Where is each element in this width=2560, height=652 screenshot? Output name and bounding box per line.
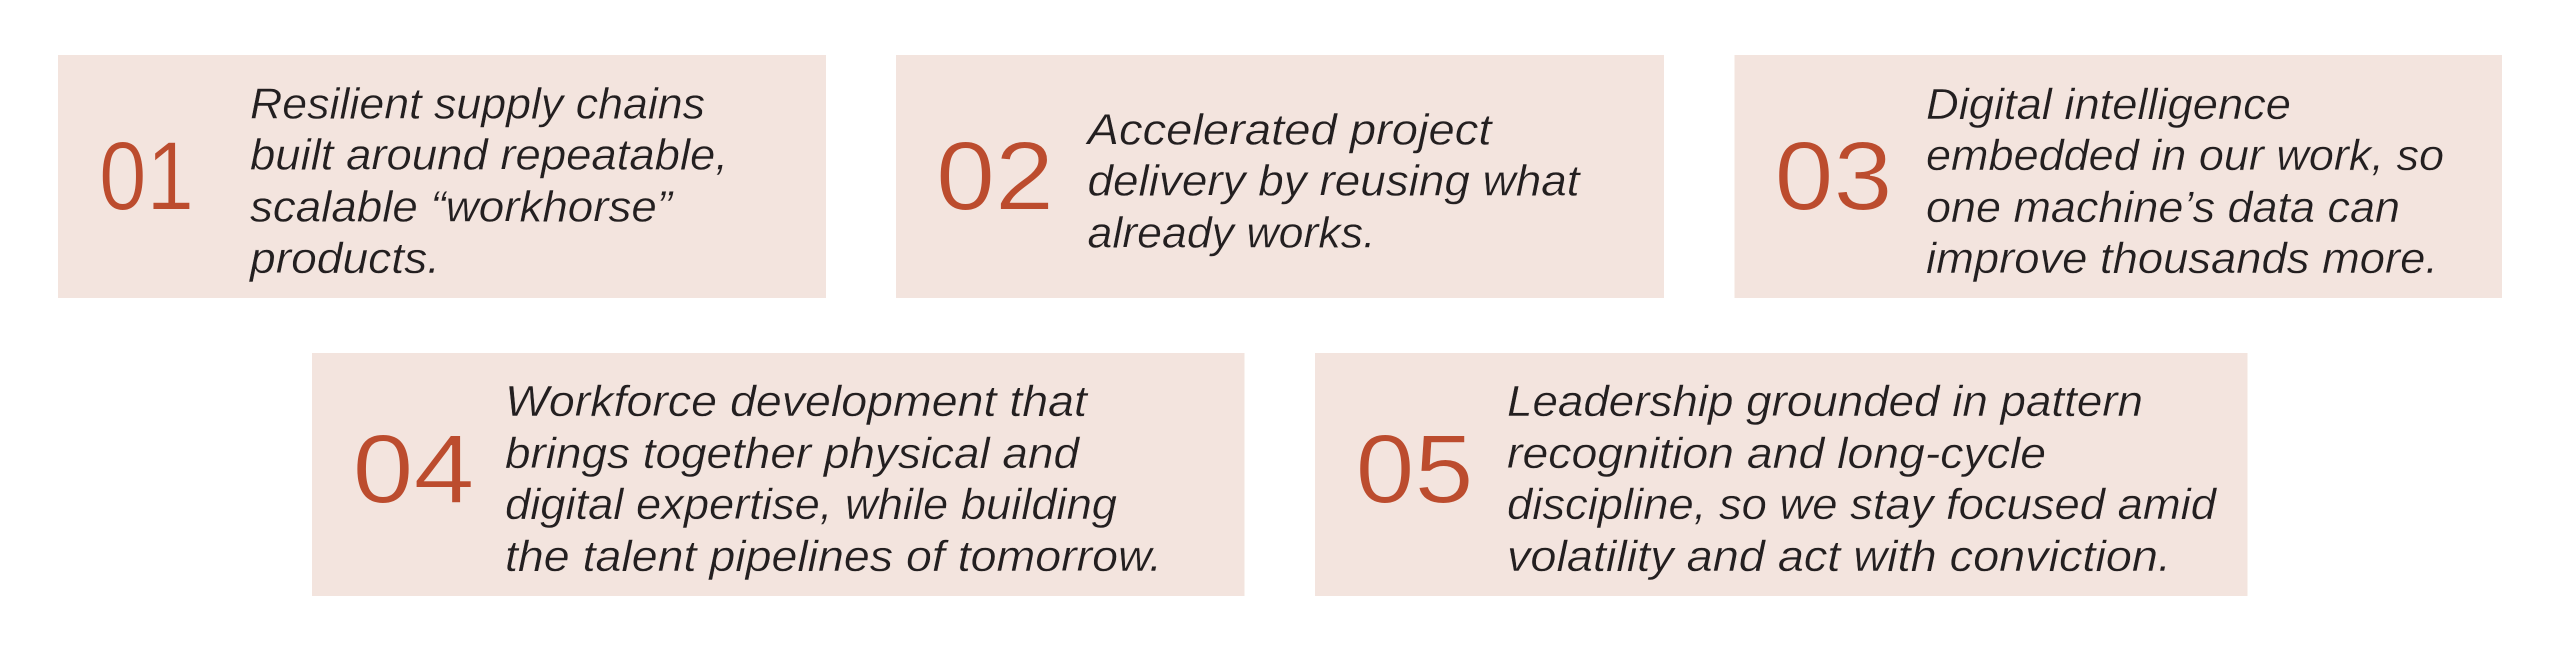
text block 04 bbox=[505, 377, 1162, 581]
text block 04: Workforce development that bbox=[505, 377, 1089, 426]
text block 02: already works. bbox=[1088, 208, 1376, 258]
text block 02 bbox=[1084, 106, 1581, 258]
panel: 03 digital intelligence bbox=[1734, 55, 2502, 298]
panel: 02 accelerated project delivery bbox=[896, 55, 1664, 298]
text block 05: Leadership grounded in pattern bbox=[1507, 377, 2143, 426]
text block 02: delivery by reusing what bbox=[1088, 156, 1581, 206]
text block 01: Resilient supply chains bbox=[250, 80, 705, 128]
text block 01: built around repeatable, bbox=[250, 130, 728, 180]
text block 03 bbox=[1926, 80, 2444, 283]
text block 05: volatility and act with conviction. bbox=[1507, 532, 2171, 581]
panel: 01 resilient supply chains bbox=[58, 55, 826, 298]
text block 03: one machine’s data can bbox=[1926, 183, 2400, 232]
text block 03: embedded in our work, so bbox=[1926, 131, 2444, 180]
text block 05 bbox=[1507, 377, 2218, 581]
text block 04: digital expertise, while building bbox=[505, 480, 1118, 529]
text block 04: brings together physical and bbox=[505, 429, 1081, 478]
number 01: 01 bbox=[99, 122, 194, 230]
panel: 05 leadership bbox=[1315, 353, 2248, 596]
text block 03: Digital intelligence bbox=[1926, 80, 2291, 129]
number 04: 04 bbox=[352, 414, 474, 524]
text block 05: discipline, so we stay focused amid bbox=[1507, 480, 2218, 529]
text block 04: the talent pipelines of tomorrow. bbox=[505, 532, 1162, 581]
text block 02: Accelerated project bbox=[1084, 106, 1493, 154]
number 03: 03 bbox=[1774, 122, 1892, 230]
text block 01 bbox=[248, 80, 728, 283]
panel: 04 workforce development bbox=[312, 353, 1244, 596]
number 02: 02 bbox=[936, 122, 1054, 230]
text block 01: products. bbox=[248, 234, 440, 283]
number 05: 05 bbox=[1356, 414, 1474, 524]
text block 03: improve thousands more. bbox=[1926, 234, 2438, 283]
text block 05: recognition and long-cycle bbox=[1507, 429, 2046, 478]
text block 01: scalable “workhorse” bbox=[250, 182, 674, 232]
